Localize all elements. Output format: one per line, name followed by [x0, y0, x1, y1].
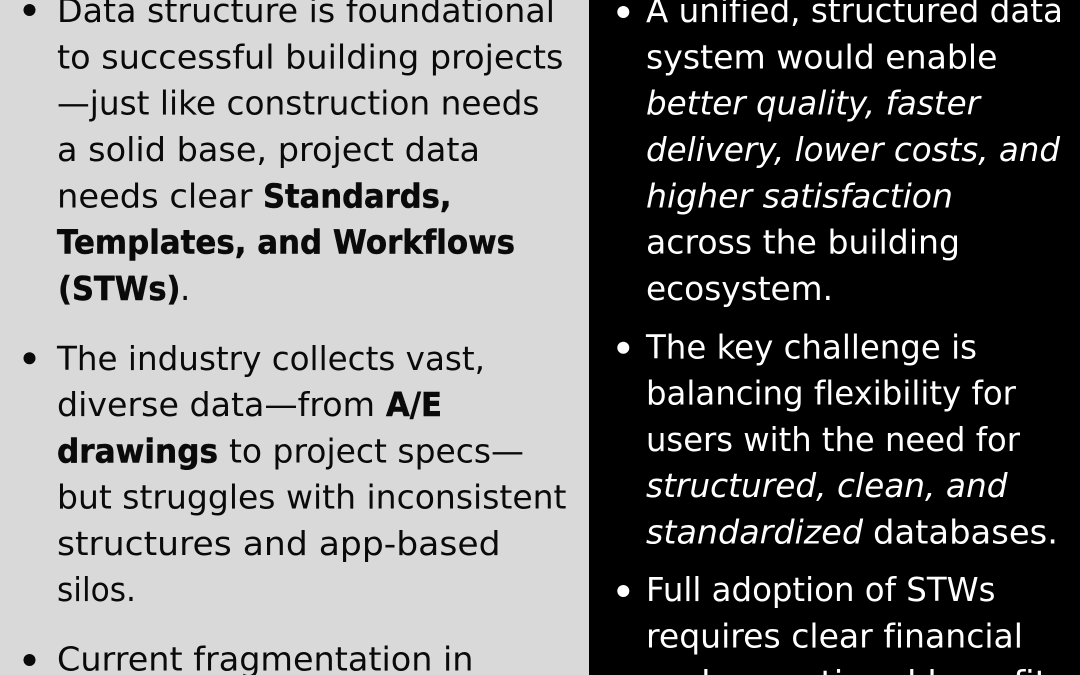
- text block: first left bullet: .: [180, 270, 190, 308]
- text block: first left bullet: —just like construction needs: [57, 85, 540, 123]
- bullet point: unified structured data system: [617, 0, 1063, 308]
- text block: first right bullet: [646, 0, 1063, 308]
- panel: right black column: [589, 0, 1080, 675]
- text block: second right bullet: [645, 328, 1058, 551]
- text block: third right bullet: requires clear financial: [646, 618, 1023, 656]
- text block: first left bullet: [57, 0, 564, 308]
- text block: second left bullet: but struggles with inconsistent: [57, 479, 566, 517]
- bullet marker: [617, 585, 629, 597]
- text block: second left bullet: drawings: [57, 432, 218, 470]
- text block: first left bullet: a solid base, project data: [57, 131, 480, 169]
- text block: third right bullet: Full adoption of STWs: [646, 571, 996, 609]
- left panel background: [0, 0, 589, 675]
- bullet marker: [617, 342, 629, 354]
- bullet point: data structure is foundational: [24, 0, 564, 308]
- text block: first left bullet: needs clear: [57, 177, 253, 215]
- bullet point: current fragmentation: [24, 640, 473, 675]
- text block: second left bullet: structures and app-based: [57, 525, 500, 563]
- text block: first right bullet: ecosystem.: [646, 270, 833, 308]
- text block: first right bullet: higher satisfaction: [646, 177, 953, 215]
- bullet marker: [617, 6, 629, 18]
- bullet marker: [24, 4, 36, 16]
- bullet point: balancing flexibility: [617, 328, 1058, 551]
- text block: first left bullet: (STWs): [58, 270, 180, 308]
- bullet marker: [24, 352, 36, 364]
- text block: first right bullet: across the building: [646, 224, 960, 262]
- bullet point: full adoption of STWs: [617, 571, 1066, 675]
- text block: second left bullet: to project specs—: [229, 432, 524, 470]
- bullet marker: [24, 654, 36, 666]
- text block: first right bullet: better quality, faster: [646, 85, 983, 123]
- text block: first right bullet: delivery, lower costs, and: [646, 131, 1060, 169]
- text block: second left bullet: [56, 340, 567, 609]
- text block: second right bullet: structured, clean, and: [646, 467, 1008, 505]
- text block: first right bullet: system would enable: [646, 38, 998, 76]
- text block: second right bullet: standardized: [646, 513, 863, 551]
- bullet point: industry collects vast data: [24, 340, 566, 609]
- text block: second left bullet: A/E: [386, 386, 442, 424]
- text block: second right bullet: balancing flexibility for: [646, 374, 1017, 412]
- text block: second right bullet: databases.: [873, 513, 1058, 551]
- text block: second left bullet: The industry collects vast,: [56, 340, 485, 378]
- text block: third right bullet: [646, 571, 1066, 675]
- text block: first left bullet: Templates, and Workflows: [57, 224, 515, 262]
- text block: second right bullet: The key challenge is: [645, 328, 977, 366]
- text block: first left bullet: to successful building projects: [57, 38, 564, 76]
- text block: second right bullet: users with the need for: [646, 421, 1021, 459]
- panel: left grey column: [0, 0, 589, 675]
- right panel background: [589, 0, 1080, 675]
- text block: second left bullet: silos.: [57, 571, 136, 609]
- text block: second left bullet: diverse data—from: [57, 386, 375, 424]
- text block: first left bullet: Standards,: [263, 177, 452, 215]
